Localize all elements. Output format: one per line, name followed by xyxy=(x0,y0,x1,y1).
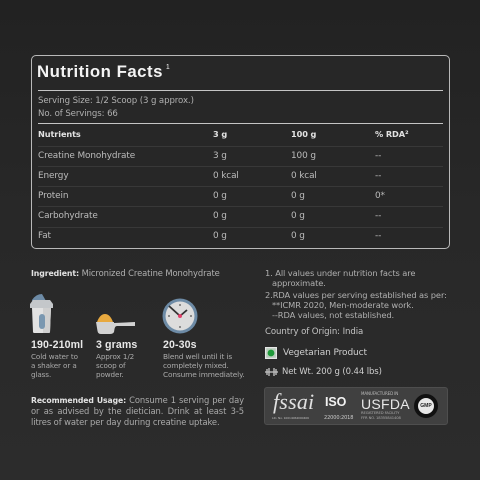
row: energy: 0 kcal xyxy=(213,171,239,181)
row: energy xyxy=(38,171,381,181)
gmp badge: GMP xyxy=(420,403,432,409)
recommended usage: or as advised by the dietician. Drink at least 3-5 xyxy=(31,406,244,416)
step 1: water amount: Cold water to xyxy=(31,352,78,361)
step 3: blend time: Blend well until it is xyxy=(163,352,232,361)
table header: % RDA² xyxy=(375,129,408,139)
icon: clock xyxy=(162,298,198,334)
step 2: powder amount: scoop of xyxy=(96,361,125,370)
usfda registration: FFR NO. 18355841408 xyxy=(361,416,401,420)
step 3: blend time: completely mixed. xyxy=(163,361,229,370)
country of origin: Country of Origin: India xyxy=(265,327,363,337)
footnotes: 1. All values under nutrition facts are xyxy=(265,268,415,278)
step 2: powder amount: 3 grams xyxy=(96,339,137,351)
table header: 3 g xyxy=(213,129,227,139)
step 1: water amount: a shaker or a xyxy=(31,361,77,370)
row: protein: 0 g xyxy=(213,191,227,201)
row: protein xyxy=(38,191,385,201)
serving information xyxy=(38,96,194,119)
row: creatine monohydrate: Creatine Monohydrate xyxy=(38,151,135,161)
icon: vegetarian mark xyxy=(265,347,277,359)
serving information: Serving Size: 1/2 Scoop (3 g approx.) xyxy=(38,96,194,106)
footnotes: approximate. xyxy=(272,278,326,288)
icon: scoop with powder xyxy=(96,314,135,334)
iso logo: ISO xyxy=(325,395,346,409)
row: protein: 0* xyxy=(375,191,385,201)
row: carbohydrate: 0 g xyxy=(291,211,305,221)
step 1: water amount xyxy=(31,339,83,379)
row: creatine monohydrate: 100 g xyxy=(291,151,316,161)
fssai logo: fssai xyxy=(273,389,314,414)
row: carbohydrate: 0 g xyxy=(213,211,227,221)
row: carbohydrate: -- xyxy=(375,211,381,221)
step 2: powder amount: powder. xyxy=(96,370,124,379)
serving information: No. of Servings: 66 xyxy=(38,109,118,119)
table header: Nutrients xyxy=(38,129,81,139)
step 1: water amount: 190-210ml xyxy=(31,339,83,351)
vegetarian label: Vegetarian Product xyxy=(283,348,367,358)
certification badge panel xyxy=(264,387,448,425)
footnotes: **ICMR 2020, Men-moderate work. xyxy=(272,300,414,310)
row: energy: -- xyxy=(375,171,381,181)
row: carbohydrate xyxy=(38,211,381,221)
row: creatine monohydrate: -- xyxy=(375,151,381,161)
row: energy: Energy xyxy=(38,171,68,181)
step 3: blend time xyxy=(163,339,244,379)
table header xyxy=(38,129,408,139)
net weight: Net Wt. 200 g (0.44 lbs) xyxy=(282,367,382,377)
footnotes xyxy=(265,268,447,320)
row: creatine monohydrate xyxy=(38,151,381,161)
step 2: powder amount: Approx 1/2 xyxy=(96,352,134,361)
usfda registration xyxy=(361,411,401,420)
gmp badge xyxy=(414,394,438,418)
row: fat xyxy=(38,231,381,241)
row: creatine monohydrate: 3 g xyxy=(213,151,227,161)
step 3: blend time: 20-30s xyxy=(163,339,197,351)
recommended usage xyxy=(31,395,244,427)
icon: dumbbell weight xyxy=(265,368,278,376)
row: protein: 0 g xyxy=(291,191,305,201)
recommended usage: litres of water per day during creatine uptake. xyxy=(31,417,220,427)
footnotes: --RDA values, not established. xyxy=(272,310,394,320)
row: energy: 0 kcal xyxy=(291,171,317,181)
fssai licence label: LIC. No. 10014064000406 xyxy=(272,416,309,420)
row: fat: Fat xyxy=(38,231,51,241)
panel: nutrition facts table xyxy=(31,55,450,249)
iso number: 22000:2018 xyxy=(324,415,353,421)
usfda registration: REGISTERED FACILITY xyxy=(361,411,399,415)
row: fat: 0 g xyxy=(291,231,305,241)
usfda logo: USFDA xyxy=(361,396,410,412)
icon: shaker bottle xyxy=(30,294,53,333)
recommended usage: Recommended Usage: Consume 1 serving per day xyxy=(31,395,244,405)
row: carbohydrate: Carbohydrate xyxy=(38,211,98,221)
step 3: blend time: Consume immediately. xyxy=(163,370,244,379)
row: protein: Protein xyxy=(38,191,68,201)
step 2: powder amount xyxy=(96,339,137,379)
row: fat: -- xyxy=(375,231,381,241)
row: fat: 0 g xyxy=(213,231,227,241)
title: Nutrition Facts 1 xyxy=(37,62,170,81)
footnotes: 2.RDA values per serving established as per: xyxy=(265,290,447,300)
ingredient line: Ingredient: Micronized Creatine Monohydrate xyxy=(31,268,220,278)
step 1: water amount: glass. xyxy=(31,370,51,379)
table header: 100 g xyxy=(291,129,316,139)
usfda text: MANUFACTURED IN xyxy=(361,391,398,396)
